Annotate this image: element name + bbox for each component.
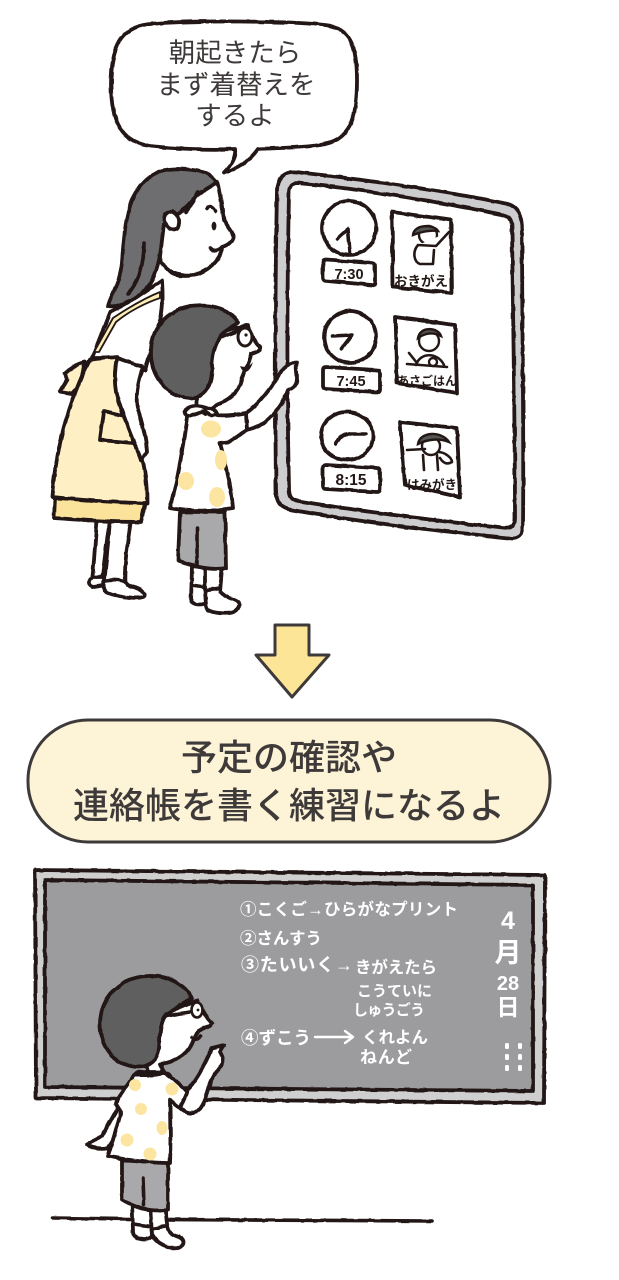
headline banner: 連絡帳を書く練習になるよ <box>73 785 505 826</box>
child pointing at board <box>151 306 297 613</box>
clock 8:15 <box>321 412 373 460</box>
mother hair <box>108 169 217 306</box>
lesson schedule in chalk: くれよん <box>362 1028 428 1047</box>
picture card: getting dressed <box>392 212 452 293</box>
speech bubble <box>111 21 357 172</box>
lesson schedule in chalk <box>240 899 458 1067</box>
child shorts <box>178 512 226 569</box>
lesson schedule in chalk: ④ずこう <box>241 1028 311 1048</box>
lesson schedule in chalk: こうていに <box>357 983 432 1000</box>
apron pocket <box>100 411 133 443</box>
chalk arrow <box>315 1031 353 1043</box>
time label 7:30 <box>323 260 375 285</box>
time label 7:30: 7:30 <box>334 267 364 283</box>
mother <box>52 169 233 598</box>
child shirt <box>170 411 247 511</box>
speech bubble: まず着替えを <box>156 70 316 100</box>
down arrow <box>256 625 329 697</box>
child shorts <box>122 1160 168 1211</box>
mother shoes <box>89 577 145 598</box>
board frame <box>275 172 523 538</box>
child glasses and smile <box>166 1002 202 1039</box>
picture card: brushing teeth <box>400 422 460 497</box>
child glasses and mouth <box>222 328 253 372</box>
mother facial features <box>128 192 222 294</box>
mother blouse <box>92 280 163 370</box>
time label 7:45: 7:45 <box>336 374 366 390</box>
chalk dots <box>505 1043 522 1071</box>
picture card: breakfast: あさごはん <box>397 373 457 388</box>
child collar <box>185 406 218 416</box>
picture card: getting dressed: おきがえ <box>394 273 448 289</box>
child shirt <box>108 1073 187 1163</box>
headline banner: 予定の確認や <box>181 737 397 778</box>
lesson schedule in chalk: ①こくご→ひらがなプリント <box>240 899 458 919</box>
clock 7:30 <box>322 201 376 255</box>
picture card: breakfast <box>395 317 457 393</box>
child collar <box>135 1072 170 1075</box>
child legs and feet <box>132 1200 183 1248</box>
date in chalk: 日 <box>496 994 520 1020</box>
apron strap <box>94 292 160 352</box>
lesson schedule in chalk: ②さんすう <box>240 929 322 948</box>
child neck and face <box>190 325 260 414</box>
blackboard surface <box>45 880 533 1091</box>
apron bow <box>60 362 85 394</box>
speech bubble: 朝起きたら <box>169 38 301 68</box>
lesson schedule in chalk: ③たいいく→ <box>241 955 353 975</box>
picture card: brushing teeth: はみがき <box>407 477 457 492</box>
time label 8:15 <box>323 465 380 492</box>
mother face <box>160 182 233 276</box>
headline banner <box>28 720 550 842</box>
speech bubble: するよ <box>195 101 275 131</box>
lesson schedule in chalk: きがえたら <box>355 957 437 977</box>
lesson schedule in chalk: ねんど <box>360 1048 412 1067</box>
child shirt dots <box>120 1079 178 1160</box>
date in chalk: 28 <box>497 973 519 995</box>
floor line <box>53 1218 432 1221</box>
blackboard <box>35 870 545 1103</box>
time label 7:45 <box>323 367 380 392</box>
child raised arm <box>180 1045 224 1113</box>
date in chalk: 4 <box>501 907 515 935</box>
child raised arm <box>245 362 297 430</box>
child hair <box>151 306 238 398</box>
lesson schedule in chalk: しゅうごう <box>353 1001 425 1019</box>
child hair <box>100 976 192 1067</box>
child neck and face <box>146 1000 212 1072</box>
apron skirt band <box>54 498 145 522</box>
apron <box>52 357 147 503</box>
blackboard frame <box>35 870 545 1103</box>
date in chalk <box>494 907 522 1020</box>
mother arm <box>115 358 147 460</box>
mother legs <box>92 520 131 585</box>
child at blackboard <box>87 976 224 1248</box>
child left arm <box>87 1104 120 1148</box>
mother ear <box>164 211 179 229</box>
time label 8:15: 8:15 <box>335 472 367 489</box>
schedule board on wall <box>275 172 523 538</box>
child legs and feet <box>191 566 239 613</box>
child shirt dots <box>178 420 227 507</box>
date in chalk: 月 <box>494 938 522 968</box>
clock 7:45 <box>324 311 376 363</box>
